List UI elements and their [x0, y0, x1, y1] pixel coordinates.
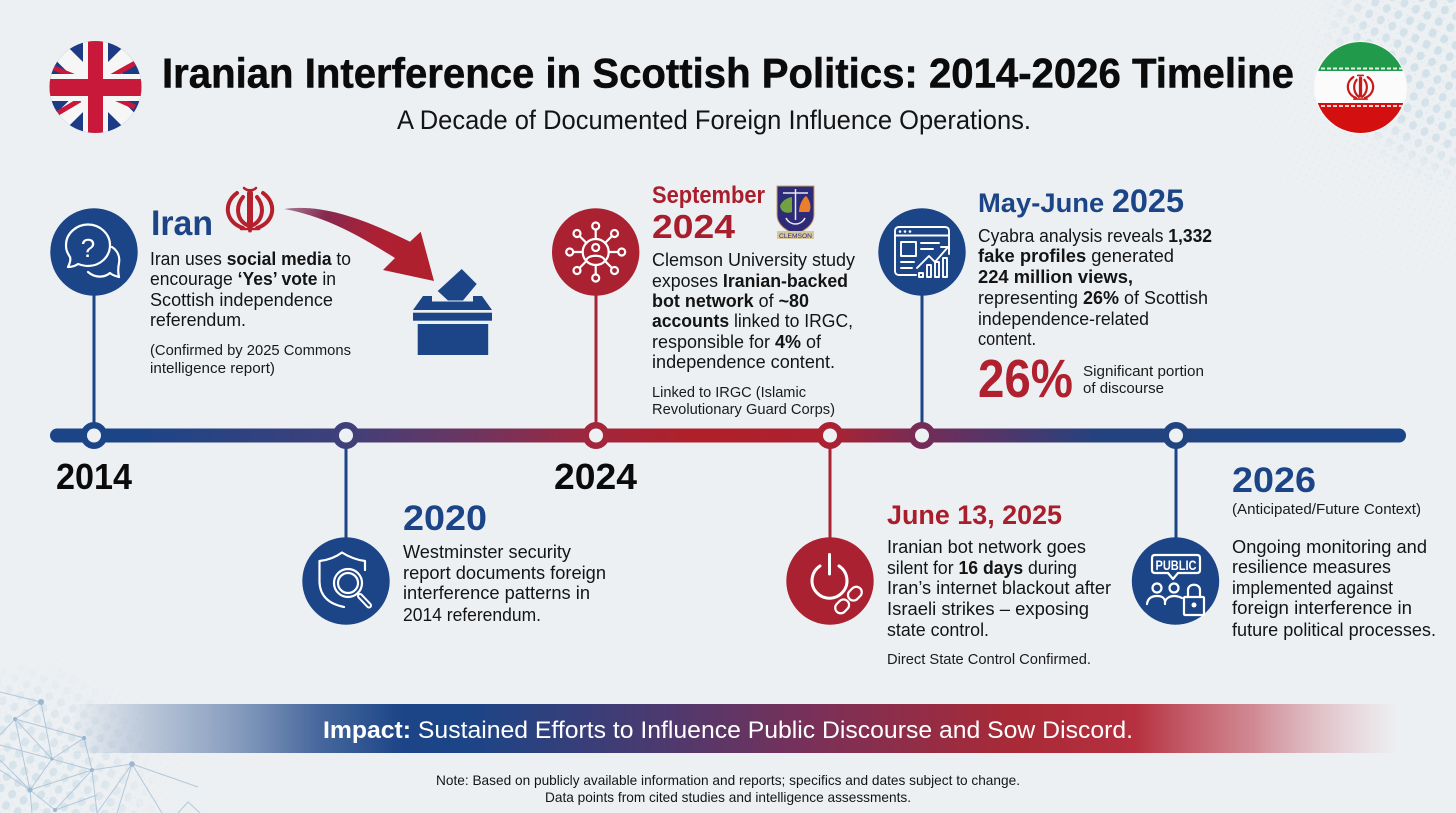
text: IRGC note	[652, 384, 835, 418]
banner: impact	[70, 704, 1400, 753]
text: 2025 description: Cyabra analysis reveals 1,332	[978, 225, 1212, 246]
year heading: 2020: 2020	[403, 499, 487, 538]
text: 2026 description: resilience measures	[1232, 556, 1391, 577]
panel: 2026	[1132, 461, 1436, 640]
panel: May-June 2025	[878, 183, 1212, 409]
text: 2024 description: independence content.	[652, 351, 835, 372]
heading: Iran: Iran	[151, 204, 213, 243]
heading: May-June 2025: May-June 2025	[978, 183, 1184, 219]
text: 2024 description: bot network of ~80	[652, 290, 809, 311]
icon: power and broken link	[786, 537, 874, 625]
text: 2020 description: 2014 referendum.	[403, 604, 541, 625]
timeline bar	[50, 428, 1406, 442]
year label: 2024: 2024	[554, 456, 637, 497]
text: 2020 description	[403, 541, 606, 625]
text: 2025 description: fake profiles generated	[978, 245, 1174, 266]
text: 2025 description: representing 26% of Scottish	[978, 287, 1208, 308]
text: 2025 description	[978, 225, 1212, 349]
text: 2025 description: content.	[978, 328, 1036, 349]
heading: September 2024: September	[652, 182, 765, 209]
banner: impact: Impact: Sustained Efforts to Influence Public Discourse and Sow Discord.	[323, 717, 1133, 744]
text: June 2025 description	[887, 536, 1111, 640]
text: June 2025 description: Iran’s internet blackout after	[887, 577, 1111, 598]
text: 2026 description: implemented against	[1232, 577, 1393, 598]
year label: 2014: 2014	[56, 456, 132, 497]
text: IRGC note: Linked to IRGC (Islamic	[652, 384, 806, 401]
timeline node: June 2025	[816, 422, 844, 449]
icon: public and lock: PUBLIC	[1156, 558, 1197, 573]
icon: chat question: ?	[81, 233, 95, 263]
heading: September 2024: 2024	[652, 208, 736, 245]
text: 2020 description: report documents foreign	[403, 562, 606, 583]
text: IRGC note: Revolutionary Guard Corps)	[652, 401, 835, 418]
text: 2026 description: Ongoing monitoring and	[1232, 536, 1427, 557]
text: 2014 description: referendum.	[150, 309, 246, 330]
connector: June 2025	[828, 445, 832, 539]
icon: chat question	[50, 208, 138, 296]
text: 2014 description: Iran uses social media to	[150, 248, 351, 269]
text: state control note: Direct State Control Confirmed.	[887, 651, 1091, 668]
text: 2014 description: Scottish independence	[150, 289, 333, 310]
subtitle: A Decade of Documented Foreign Influence Operations.	[397, 105, 1031, 135]
text: 2026 description: future political processes.	[1232, 619, 1436, 640]
icon: Clemson crest	[777, 186, 814, 240]
icon: Iran emblem	[228, 188, 272, 232]
heading: September 2024	[652, 182, 765, 245]
panel: September 2024	[552, 182, 856, 418]
timeline node: 2024	[582, 422, 610, 449]
year heading: 2026: 2026	[1232, 461, 1316, 500]
connector: 2014	[92, 294, 96, 426]
timeline node: May-June 2025	[908, 422, 936, 449]
text: 2025 description: 224 million views,	[978, 266, 1133, 287]
statistic: 26%: 26%	[978, 349, 1073, 409]
text: 2020 description: Westminster security	[403, 541, 572, 562]
text: June 2025 description: Iranian bot network goes	[887, 536, 1086, 557]
icon: UK flag	[49, 41, 142, 133]
arrow: Iran to ballot box	[284, 208, 434, 281]
text: 2026 description: foreign interference in	[1232, 597, 1412, 618]
text: June 2025 description: Israeli strikes – exposing	[887, 598, 1089, 619]
connector: 2020	[344, 445, 348, 539]
panel: 2020	[302, 499, 606, 625]
text: 2024 description	[652, 249, 856, 372]
title: Iranian Interference in Scottish Politics: 2014-2026 Timeline	[162, 50, 1294, 96]
connector: May-June 2025	[920, 294, 924, 426]
connector: September 2024	[594, 294, 598, 426]
text: 2014 description	[150, 248, 351, 330]
text: June 2025 description: silent for 16 days during	[887, 557, 1077, 578]
text: 2024 description: Clemson University study	[652, 249, 856, 270]
text: 2020 description: interference patterns in	[403, 582, 590, 603]
timeline node: 2014	[80, 422, 108, 449]
heading: June 13, 2025: June 13, 2025	[887, 500, 1062, 530]
connector: 2026	[1174, 445, 1178, 539]
panel: 2014 Iran	[50, 188, 492, 377]
text: anticipated context: (Anticipated/Future Context)	[1232, 501, 1421, 518]
footnote: Data points from cited studies and intelligence assessments.	[545, 789, 911, 805]
icon: shield and magnifier	[302, 537, 390, 625]
icon: public and lock	[1132, 537, 1219, 625]
icon: Iran flag	[1314, 41, 1407, 134]
text: June 2025 description: state control.	[887, 619, 989, 640]
text: 2014 source note: (Confirmed by 2025 Commons	[150, 342, 351, 359]
text: 2024 description: exposes Iranian-backed	[652, 270, 848, 291]
text: 2024 description: responsible for 4% of	[652, 331, 822, 352]
footnote	[436, 772, 1020, 805]
text: 2026 description	[1232, 536, 1436, 640]
icon: analytics dashboard	[878, 208, 966, 296]
text: 2025 description: independence-related	[978, 308, 1149, 329]
icon: bot network	[552, 208, 639, 296]
icon: ballot box	[413, 269, 492, 355]
timeline node: 2026	[1162, 422, 1190, 449]
text: 2024 description: accounts linked to IRGC,	[652, 310, 853, 331]
text: 2014 description: encourage ‘Yes’ vote in	[150, 268, 336, 289]
footnote: Note: Based on publicly available information and reports; specifics and dates subject to change.	[436, 772, 1020, 788]
timeline node: 2020	[332, 422, 360, 449]
statistic caption: Significant portion	[1083, 363, 1204, 380]
text: 2014 source note: intelligence report)	[150, 360, 275, 377]
text: 2014 source note	[150, 342, 351, 377]
panel: June 13, 2025	[786, 500, 1111, 668]
statistic caption: of discourse	[1083, 380, 1164, 397]
statistic caption	[1083, 363, 1204, 397]
icon: Clemson crest: CLEMSON	[779, 233, 812, 240]
